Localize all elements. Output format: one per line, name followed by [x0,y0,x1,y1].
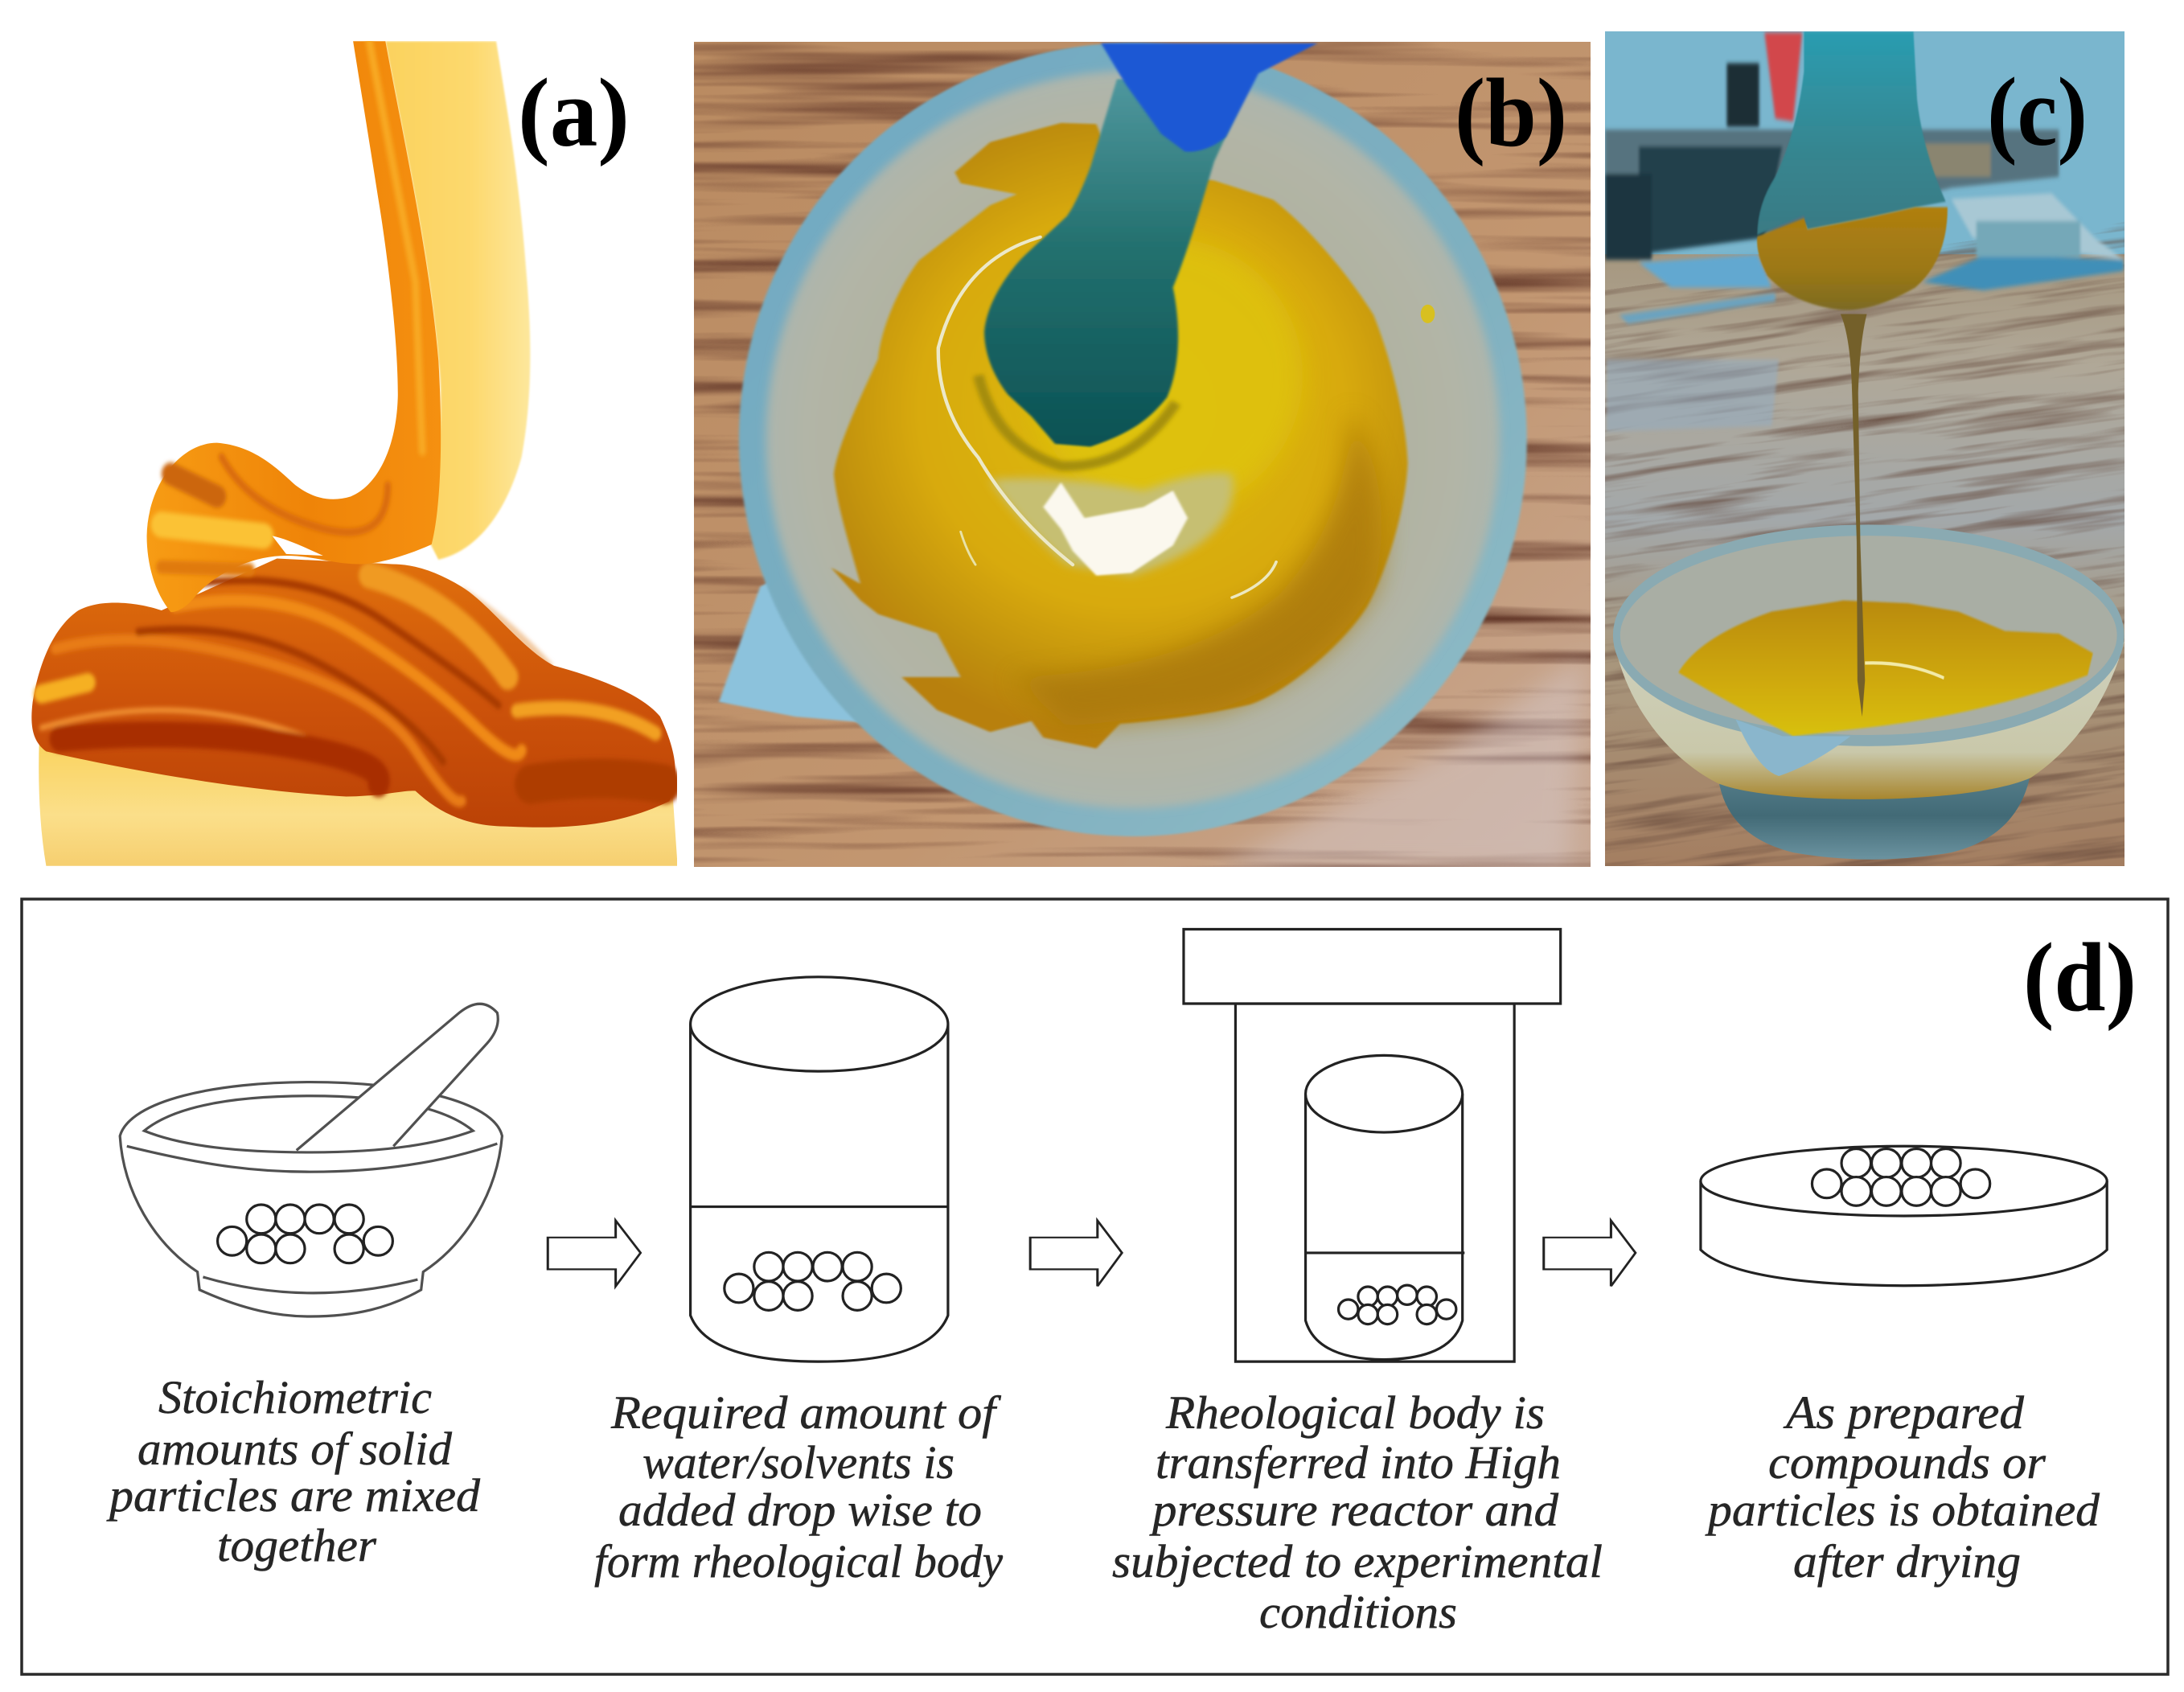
amber honey stream and curl [147,41,441,612]
pale honey stream [385,41,530,560]
mortar spout [1736,720,1850,776]
yellow paste [831,123,1408,749]
honey reflection on surface [39,739,678,866]
caption: step 1: Stoichiometric [158,1371,432,1423]
pestle [984,79,1250,446]
caption: step 3: subjected to experimental [1112,1535,1603,1587]
mortar rim [739,43,1527,836]
mortar foot [1718,772,2031,860]
caption: step 3: Rheological body is [1165,1386,1545,1439]
panel b: mortar with yellow paste, top view [684,24,1608,885]
caption: step 2: form rheological body [594,1535,1003,1587]
yellow paste in mortar [1678,601,2093,736]
oily ring around pestle [979,376,1176,466]
panel c: paste dripping from pestle [1435,16,2184,1086]
mortar body [1615,642,2124,799]
caption: step 2: water/solvents is [642,1436,954,1489]
blurred background objects [1605,33,2124,432]
panel a: viscous honey photo [31,41,678,866]
white gap under curl [273,536,323,556]
lower honey mass [31,558,675,828]
pestle stem and head [1757,31,1946,235]
label (b): (b) [1455,59,1567,167]
caption: step 4: particles is obtained [1705,1484,2100,1536]
glare on paste [1865,663,1944,678]
caption: step 3: transferred into High [1156,1436,1561,1489]
step 1: mortar and pestle icon [120,1004,502,1316]
dark ochre lower band [1014,409,1381,726]
caption: step 1: together [217,1519,376,1571]
ochre paste on pestle [1757,207,1948,310]
caption: step 1: particles are mixed [106,1469,481,1522]
mortar spout [719,576,860,722]
caption: step 2 [594,1386,1003,1587]
blue glove [1101,43,1317,152]
panel d: process schematic [22,899,2168,1674]
mortar inner wall [766,71,1500,808]
caption: step 4: As prepared [1783,1386,2025,1439]
bright yellow centre [1032,238,1303,512]
label (c): (c) [1987,58,2088,166]
sheen region [990,473,1233,576]
curl shading [162,41,422,570]
honey fold highlights [42,576,665,802]
curved wet highlights [938,237,1276,598]
small droplet [1421,305,1435,323]
white glare [1043,483,1188,576]
caption: step 1: amounts of solid [138,1423,453,1475]
caption: step 3 [1112,1386,1603,1638]
pale light on table [1214,655,1586,869]
step 3: high pressure reactor [1184,929,1561,1361]
step 4: drying dish with particles [1701,1146,2107,1286]
table top [1592,254,2155,885]
thread of paste [1841,314,1866,717]
caption: step 3: pressure reactor and [1149,1484,1559,1536]
caption: step 3: conditions [1259,1586,1457,1638]
caption: step 2: added drop wise to [618,1484,982,1536]
caption: step 1 [106,1371,481,1571]
caption: step 2: Required amount of [610,1386,1001,1439]
frame [22,899,2168,1674]
step 2: beaker with particles [691,977,948,1361]
wood table [684,24,1608,885]
mortar rim and inner wall [1616,530,2120,741]
arrow 2 [1030,1221,1122,1286]
arrow 3 [1544,1221,1636,1286]
blue wall background [1592,16,2155,271]
caption: step 4: compounds or [1768,1436,2046,1489]
caption: step 4 [1705,1386,2100,1587]
label (d): (d) [2023,923,2137,1032]
caption: step 4: after drying [1793,1535,2021,1587]
faint far edge of honey [462,585,555,666]
arrow 1 [548,1221,641,1286]
label (a): (a) [518,59,630,167]
